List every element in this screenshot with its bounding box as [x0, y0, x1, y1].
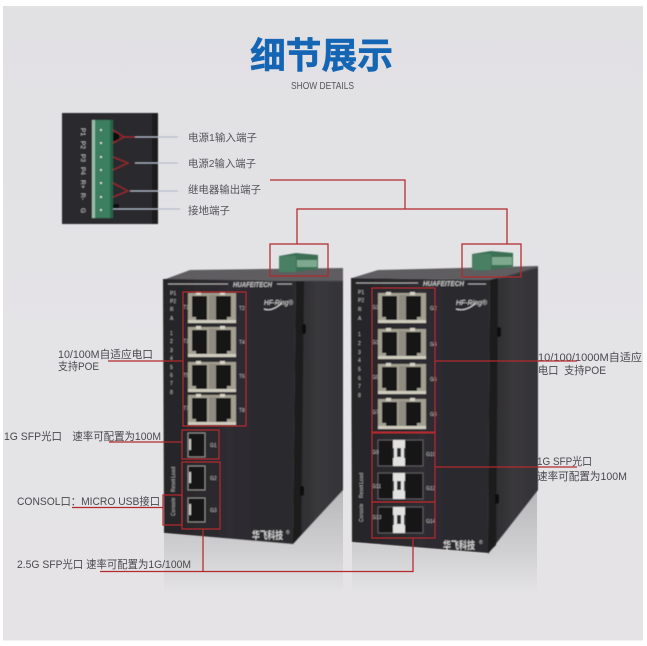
device: left switch: 7	[170, 381, 173, 387]
device: right switch: G11	[372, 484, 381, 490]
device: right switch: G7	[372, 410, 379, 416]
inset: terminal block close-up: G	[79, 208, 86, 213]
device: right switch: R	[358, 307, 362, 313]
device: right switch: 8	[358, 393, 361, 399]
device: left switch: 6	[170, 373, 173, 379]
device: right switch: A	[358, 316, 362, 322]
device: right switch: 7	[358, 384, 361, 390]
device: right switch: G5	[372, 375, 379, 381]
label: relay output: 继电器输出端子	[188, 183, 261, 196]
device: left switch: G1	[210, 443, 217, 449]
device: left switch: T6	[239, 374, 245, 380]
device: right switch: 4	[358, 358, 361, 364]
device: left switch: T4	[239, 340, 245, 346]
reflection: left device	[164, 490, 343, 592]
label: power 1 input: 电源1输入端子	[188, 131, 257, 144]
device: right switch: G14	[426, 519, 436, 525]
device: left switch: G2	[210, 476, 217, 482]
subtitle: SHOW DETAILS	[291, 81, 354, 92]
label: right copper ports: 电口 支持POE	[538, 363, 606, 377]
device: right switch: G13	[372, 515, 382, 521]
device: right switch: G9	[372, 450, 379, 456]
device: right switch: P2	[358, 298, 364, 304]
device: left switch: R	[170, 307, 174, 313]
device: right switch: HF-Ring®	[456, 299, 488, 307]
inset: terminal block close-up: R-	[79, 193, 86, 200]
device: left switch: Console	[171, 497, 177, 516]
label: power 2 input: 电源2输入端子	[188, 157, 256, 170]
device: right switch: P1	[358, 290, 364, 296]
callout: right device highlight boxes	[372, 288, 435, 538]
label: left 1G SFP: 1G SFP光口 速率可配置为100M	[4, 429, 161, 443]
title: 细节展示	[250, 35, 393, 76]
icon: left green terminal block	[279, 253, 318, 273]
device: left switch: 1	[170, 331, 173, 337]
label: right 1G SFP: 1G SFP光口	[537, 454, 592, 468]
device: left switch: T8	[239, 408, 245, 414]
label: 2.5G SFP with shared connector	[17, 529, 413, 572]
device: right switch: G8	[430, 412, 437, 418]
label: console port: CONSOL口：MICRO USB接口	[17, 495, 160, 508]
callout: top connector lines and boxes	[270, 180, 521, 277]
label: left copper ports: 支持POE	[58, 359, 99, 373]
device: left switch: HUAFEITECH	[233, 282, 273, 289]
device: right switch: ®	[479, 539, 483, 546]
device: right switch: G12	[426, 486, 436, 492]
device: right switch: G1	[372, 305, 379, 311]
device: right switch: G10	[426, 452, 436, 458]
device: left switch: Load	[171, 467, 177, 478]
device: left switch: T3	[183, 339, 189, 345]
label: right 1G SFP	[435, 454, 627, 483]
device: right switch: G4	[430, 342, 437, 348]
device: left switch: P1	[170, 291, 176, 297]
device: left switch: ®	[286, 529, 290, 536]
device: left switch: G3	[210, 508, 217, 514]
device: left switch: 3	[170, 348, 173, 354]
inset: terminal block close-up: R+	[79, 180, 86, 189]
label: right copper ports: 10/100/1000M自适应	[538, 350, 642, 364]
device: right switch: Console	[359, 503, 365, 522]
device: right switch: 华飞科技	[443, 539, 475, 552]
inset: terminal block close-up: P1	[79, 128, 86, 136]
device: left switch: Reset	[171, 478, 177, 492]
label: left copper ports: 10/100M自适应电口	[58, 347, 153, 361]
device: left switch: 2	[170, 339, 173, 345]
device: right switch: 5	[358, 367, 361, 373]
device: left switch: T1	[183, 305, 189, 311]
device: left switch: T5	[183, 373, 189, 379]
device: left switch: HF-Ring®	[264, 299, 294, 307]
device: right switch: G6	[430, 377, 437, 383]
device: right switch: G3	[372, 340, 379, 346]
label: left copper ports	[58, 347, 183, 373]
label: right copper ports	[435, 350, 642, 377]
inset: terminal block close-up: P2	[79, 141, 86, 149]
device: left switch: 4	[170, 356, 173, 362]
label: 2.5G SFP with shared connector: 2.5G SFP光口 速率可配置为1G/100M	[17, 557, 191, 571]
inset: terminal block close-up	[62, 113, 180, 224]
device: left switch: 5	[170, 365, 173, 371]
device: left switch: T7	[183, 406, 189, 412]
reflection: right device	[352, 490, 537, 592]
device: right switch: 2	[358, 341, 361, 347]
label: right 1G SFP: 速率可配置为100M	[537, 469, 627, 483]
inset: terminal block close-up: P3	[79, 154, 86, 162]
icon: right green terminal block	[472, 251, 513, 271]
device: right switch: G2	[430, 306, 437, 312]
device: right switch: 1	[358, 332, 361, 338]
device: right switch: Load	[359, 473, 365, 484]
inset: terminal block close-up: P4	[79, 167, 86, 175]
device: left switch: 华飞科技	[252, 529, 283, 542]
device: right switch: HUAFEITECH	[423, 281, 465, 288]
device: right switch: 3	[358, 350, 361, 356]
callout: left device highlight boxes	[163, 292, 246, 529]
device: left switch: T2	[239, 306, 245, 312]
device: left switch: P2	[170, 299, 176, 305]
label: ground: 接地端子	[188, 204, 230, 217]
device: right switch: 6	[358, 376, 361, 382]
device: left switch: A	[170, 316, 174, 322]
device: right switch	[351, 266, 538, 554]
device: right switch: Reset	[359, 484, 365, 498]
device: left switch	[163, 268, 343, 544]
device: left switch: 8	[170, 390, 173, 396]
